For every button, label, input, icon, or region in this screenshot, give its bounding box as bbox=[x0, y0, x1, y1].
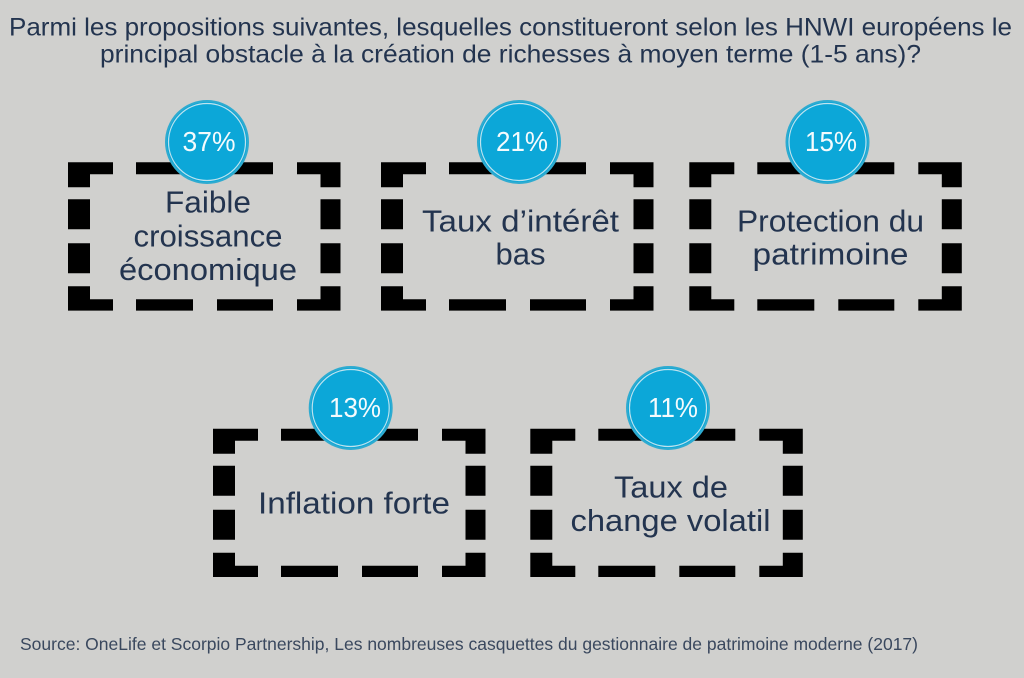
panel: taux d'intérêt bas: Taux d’intérêt bbox=[422, 204, 619, 238]
panel: taux de change volatil: Taux de bbox=[614, 470, 728, 504]
panel: protection du patrimoine: patrimoine bbox=[752, 236, 908, 272]
panel: faible croissance économique: croissance bbox=[134, 218, 282, 254]
panel: taux d'intérêt bas: 21% bbox=[496, 126, 548, 157]
panel: inflation forte: 13% bbox=[329, 392, 381, 423]
panel: taux d'intérêt bas bbox=[381, 101, 654, 311]
panel: taux de change volatil: 11% bbox=[648, 392, 698, 423]
panel: protection du patrimoine: 15% bbox=[805, 126, 857, 157]
title bbox=[9, 14, 1012, 68]
title: principal obstacle à la création de richesses à moyen terme (1-5 ans)? bbox=[100, 40, 921, 68]
panel: inflation forte: Inflation forte bbox=[258, 486, 450, 520]
panel: faible croissance économique: Faible bbox=[165, 184, 251, 220]
panel: taux de change volatil: change volatil bbox=[570, 503, 770, 538]
panel: faible croissance économique: économique bbox=[119, 252, 297, 287]
panel: taux de change volatil bbox=[530, 367, 803, 577]
panel: faible croissance économique bbox=[68, 101, 340, 311]
panel: protection du patrimoine bbox=[689, 101, 962, 311]
panel: taux d'intérêt bas: bas bbox=[496, 236, 546, 272]
panel: protection du patrimoine: Protection du bbox=[737, 204, 924, 238]
panel: faible croissance économique: 37% bbox=[182, 126, 236, 157]
panel: inflation forte bbox=[213, 367, 486, 577]
title: Parmi les propositions suivantes, lesquelles constitueront selon les HNWI européens le bbox=[9, 14, 1012, 42]
source: Source: OneLife et Scorpio Partnership, Les nombreuses casquettes du gestionnaire de patrimoine moderne (2017) bbox=[20, 634, 918, 654]
